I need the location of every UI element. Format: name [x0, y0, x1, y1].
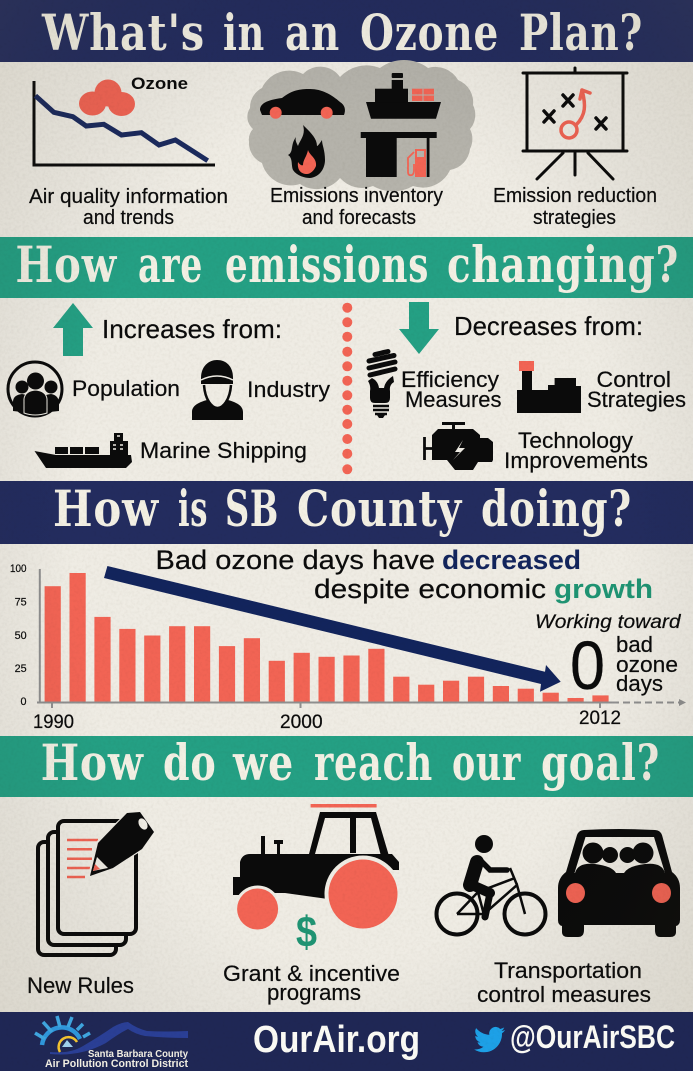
callout: decreased despite growth: despite economic	[314, 574, 546, 604]
callout: decreased despite growth: decreased	[442, 545, 581, 575]
heading band: How are emissions changing: are	[138, 235, 203, 294]
callout: decreased despite growth	[156, 545, 653, 604]
label: grant and incentive programs	[223, 961, 400, 1005]
label: emissions inventory: and forecasts	[302, 207, 416, 229]
label: efficiency measures: Measures	[405, 387, 502, 412]
icon: carpool car	[558, 829, 680, 937]
panel: emissions decreases	[368, 302, 686, 473]
heading band: How is SB County doing: How	[53, 479, 160, 538]
icon: factory	[517, 361, 581, 413]
callout: working toward zero	[535, 612, 682, 704]
arrow: down	[399, 302, 439, 354]
arrow: up	[53, 303, 93, 356]
label: transportation control measures: control measures	[477, 982, 651, 1007]
icon: air quality trend chart	[34, 74, 215, 165]
label: control strategies: Control	[596, 367, 671, 392]
heading band: How is SB County doing: doing?	[481, 479, 632, 538]
bar chart	[10, 563, 686, 733]
label: emissions inventory: Emissions inventory	[270, 185, 443, 207]
callout: working toward zero: Working toward	[535, 612, 682, 633]
bar chart: 50	[15, 630, 27, 642]
heading band: What's in an Ozone Plan: an	[285, 3, 340, 62]
callout: decreased despite growth: growth	[554, 574, 653, 604]
label: efficiency measures	[401, 367, 502, 412]
icon: tractor with dollar sign: $	[296, 908, 317, 957]
label: emission reduction strategies: strategies	[533, 207, 616, 229]
link: website: OurAir.org	[253, 1019, 420, 1061]
panel: what is in an ozone plan	[29, 60, 657, 229]
heading band: How is SB County doing	[0, 479, 693, 544]
bar chart: 1990	[33, 712, 74, 733]
icon: population	[8, 362, 62, 416]
heading band: How do we reach our goal: reach	[314, 733, 433, 792]
callout: decreased despite growth: Bad ozone days have	[156, 545, 435, 575]
heading band: What's in an Ozone Plan: What's	[41, 3, 205, 62]
bar chart: 2012	[579, 708, 621, 729]
heading band: How do we reach our goal	[0, 733, 693, 797]
heading: decreases from: Decreases from:	[454, 311, 643, 341]
heading band: How are emissions changing: emissions	[225, 235, 429, 294]
label: emission reduction strategies: Emission reduction	[493, 185, 657, 207]
icon: efficient bulb	[368, 352, 395, 418]
icon: air quality trend chart: Ozone	[131, 74, 188, 93]
logo: air pollution control district: Santa Barbara County	[88, 1049, 188, 1060]
icon: strategy board	[523, 68, 627, 179]
label: air quality information: Air quality information	[29, 186, 228, 208]
label: transportation control measures	[477, 958, 651, 1007]
callout: working toward zero: days	[616, 671, 663, 696]
heading band: How are emissions changing	[0, 235, 693, 298]
panel: bad ozone days chart	[10, 545, 686, 733]
heading band: What's in an Ozone Plan: in	[223, 3, 265, 62]
icon: twitter bird	[474, 1027, 505, 1052]
logo: air pollution control district	[35, 1016, 188, 1070]
heading band: How do we reach our goal: our	[452, 733, 521, 792]
bar chart: 25	[15, 663, 27, 675]
icon: gas station	[361, 132, 437, 177]
label: emissions inventory	[270, 185, 443, 229]
panel: how to reach the goal	[27, 804, 680, 1007]
heading band: How is SB County doing: is	[178, 479, 208, 538]
divider: dotted line	[342, 303, 352, 474]
label: control strategies	[587, 367, 686, 412]
icon: car	[260, 89, 345, 119]
label: emission reduction strategies	[493, 185, 657, 229]
heading band: What's in an Ozone Plan: Plan?	[519, 3, 643, 62]
heading band: What's in an Ozone Plan	[0, 0, 693, 62]
label: air quality information: and trends	[83, 207, 174, 229]
callout: working toward zero: ozone	[616, 652, 678, 677]
label: control strategies: Strategies	[587, 387, 686, 412]
label: industry: Industry	[247, 377, 330, 402]
label: marine shipping: Marine Shipping	[140, 438, 307, 463]
label: new rules: New Rules	[27, 973, 134, 998]
icon: new rules papers and pencil	[38, 811, 156, 955]
label: population: Population	[72, 376, 180, 401]
heading band: How do we reach our goal: we	[232, 733, 294, 792]
heading band: What's in an Ozone Plan: Ozone	[360, 3, 499, 62]
heading band: How do we reach our goal: do	[163, 733, 216, 792]
arrow: downward trend	[104, 566, 561, 692]
bar chart: 2000	[280, 712, 323, 733]
label: grant and incentive programs: programs	[267, 980, 361, 1005]
icon: marine ship	[34, 433, 132, 468]
label: efficiency measures: Efficiency	[401, 367, 499, 392]
label: technology improvements	[504, 428, 648, 473]
icon: bicycle rider	[436, 835, 546, 934]
bar chart: 100	[10, 563, 26, 575]
icon: engine	[424, 422, 493, 470]
label: grant and incentive programs: Grant & incentive	[223, 961, 400, 986]
label: air quality information	[29, 186, 228, 229]
label: technology improvements: Improvements	[504, 448, 648, 473]
logo: air pollution control district: Air Pollution Control District	[45, 1058, 188, 1070]
panel: emissions increases	[8, 303, 330, 468]
icon: emissions cloud	[247, 60, 475, 191]
heading band: How is SB County doing: County	[297, 479, 463, 538]
heading band: How is SB County doing: SB	[225, 479, 279, 538]
heading band: How do we reach our goal: goal?	[541, 733, 660, 792]
heading: increases from: Increases from:	[102, 314, 282, 344]
label: transportation control measures: Transportation	[494, 958, 642, 983]
label: technology improvements: Technology	[518, 428, 633, 453]
icon: tractor with dollar sign	[233, 804, 402, 957]
callout: working toward zero: 0	[570, 627, 605, 704]
heading band: How do we reach our goal: How	[41, 733, 144, 792]
bar chart: 0	[20, 696, 26, 708]
callout: working toward zero: bad	[616, 632, 653, 657]
heading band: How are emissions changing: How	[16, 235, 118, 294]
footer band	[0, 1012, 693, 1071]
icon: cargo ship	[366, 73, 441, 119]
bar chart: 75	[15, 597, 27, 609]
icon: fire	[288, 125, 325, 178]
icon: industry worker	[192, 360, 243, 420]
